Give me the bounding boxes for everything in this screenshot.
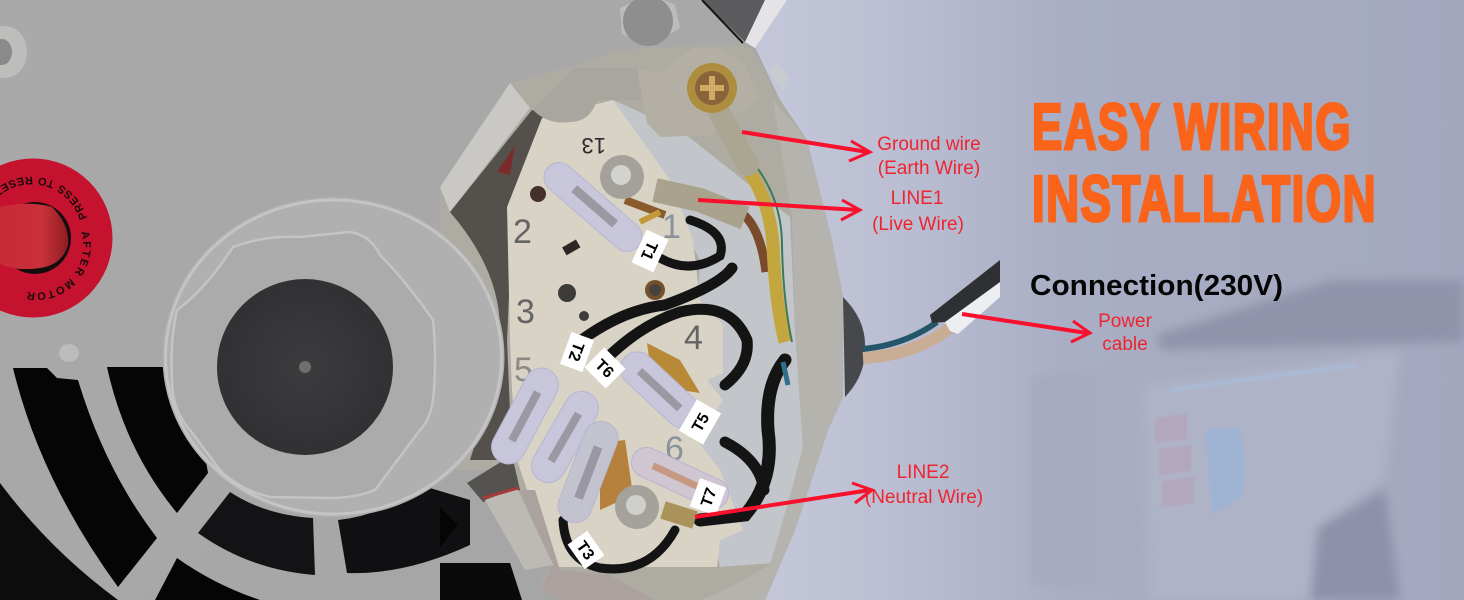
cable conductors xyxy=(863,322,950,358)
wiring compartment xyxy=(440,45,843,600)
bracket bolt on rim xyxy=(768,62,789,92)
rubber grommet xyxy=(843,297,865,397)
right frame wall xyxy=(700,100,843,600)
terminal plate xyxy=(507,100,743,567)
inner grey wall xyxy=(613,100,803,567)
tag T3 xyxy=(568,531,604,569)
bolt top left xyxy=(0,26,27,78)
small casting dimple xyxy=(59,344,79,362)
tag T3: T3 xyxy=(572,538,597,563)
terminal numbers: 1 xyxy=(662,208,681,246)
bolt top centre xyxy=(620,0,680,46)
lower cavity with red wire xyxy=(467,455,553,570)
brass tab xyxy=(647,343,700,393)
terminal numbers: 6 xyxy=(665,430,684,468)
wire tags xyxy=(560,230,726,569)
casting boss above plate xyxy=(533,68,650,122)
label: ground wire xyxy=(877,134,981,179)
label: line1 xyxy=(872,188,964,235)
label: line2 xyxy=(865,462,983,508)
ventilation openings xyxy=(0,367,522,600)
arrow: ground wire xyxy=(742,132,870,161)
terminal numbers xyxy=(513,208,703,468)
callout labels xyxy=(865,134,1153,508)
background: faded electrical panel scene xyxy=(740,0,1464,600)
lower left brace xyxy=(520,490,655,600)
motor body xyxy=(0,0,843,600)
dark cavity xyxy=(450,110,560,460)
label: ground wire: Ground wire xyxy=(877,134,981,155)
terminal nut xyxy=(600,155,644,199)
tag T1: T1 xyxy=(637,238,660,263)
tag T7 xyxy=(690,478,726,516)
tag T6: T6 xyxy=(591,356,617,382)
title xyxy=(1032,90,1377,235)
tag T5: T5 xyxy=(689,410,713,435)
earth wire xyxy=(718,110,792,342)
arrow: line2 xyxy=(695,483,872,517)
label: line1: LINE1 xyxy=(891,188,943,209)
label: power cable: cable xyxy=(1102,334,1148,355)
reset label ring text xyxy=(0,177,87,218)
label: power cable xyxy=(1098,311,1153,355)
ground screw xyxy=(687,63,737,113)
power cable xyxy=(843,260,1000,397)
arrow: power cable xyxy=(962,314,1090,342)
connector inner metal xyxy=(508,185,704,500)
terminal numbers: 4 xyxy=(684,319,703,357)
label: line2: LINE2 xyxy=(897,462,949,483)
terminal numbers: 3 xyxy=(516,293,535,331)
outer frame xyxy=(440,45,843,600)
shaft collar xyxy=(162,197,504,517)
button cap xyxy=(0,204,68,269)
insulated connectors xyxy=(486,156,733,528)
plate mark 13: 13 xyxy=(582,133,606,158)
ground lug bracket xyxy=(637,48,760,137)
label: line1: (Live Wire) xyxy=(872,214,964,235)
terminal nut lower xyxy=(600,440,695,529)
cable jacket xyxy=(945,282,1000,334)
label: power cable: Power xyxy=(1098,311,1153,332)
tag T2: T2 xyxy=(564,340,587,363)
tag T1 xyxy=(632,230,668,272)
inner hub xyxy=(172,232,435,498)
red pointer arrows xyxy=(695,132,1090,517)
line1 wire and terminal xyxy=(625,190,745,222)
label: line2: (Neutral Wire) xyxy=(865,487,983,508)
black wires xyxy=(563,220,785,569)
arrow: line1 xyxy=(698,200,860,220)
terminal numbers: 5 xyxy=(514,351,533,389)
tag T2 xyxy=(560,332,594,372)
dark shaft cap xyxy=(217,279,393,455)
tag T5 xyxy=(679,399,721,445)
tag T6 xyxy=(584,347,626,389)
label: ground wire: (Earth Wire) xyxy=(878,158,980,179)
red reset button: AFTER MOTOR xyxy=(27,232,91,300)
housing edge at top xyxy=(702,0,787,48)
subtitle: Connection(230V) xyxy=(1030,270,1283,302)
terminal numbers: 2 xyxy=(513,213,532,251)
tag T7: T7 xyxy=(698,486,721,509)
red reset button xyxy=(0,158,112,318)
